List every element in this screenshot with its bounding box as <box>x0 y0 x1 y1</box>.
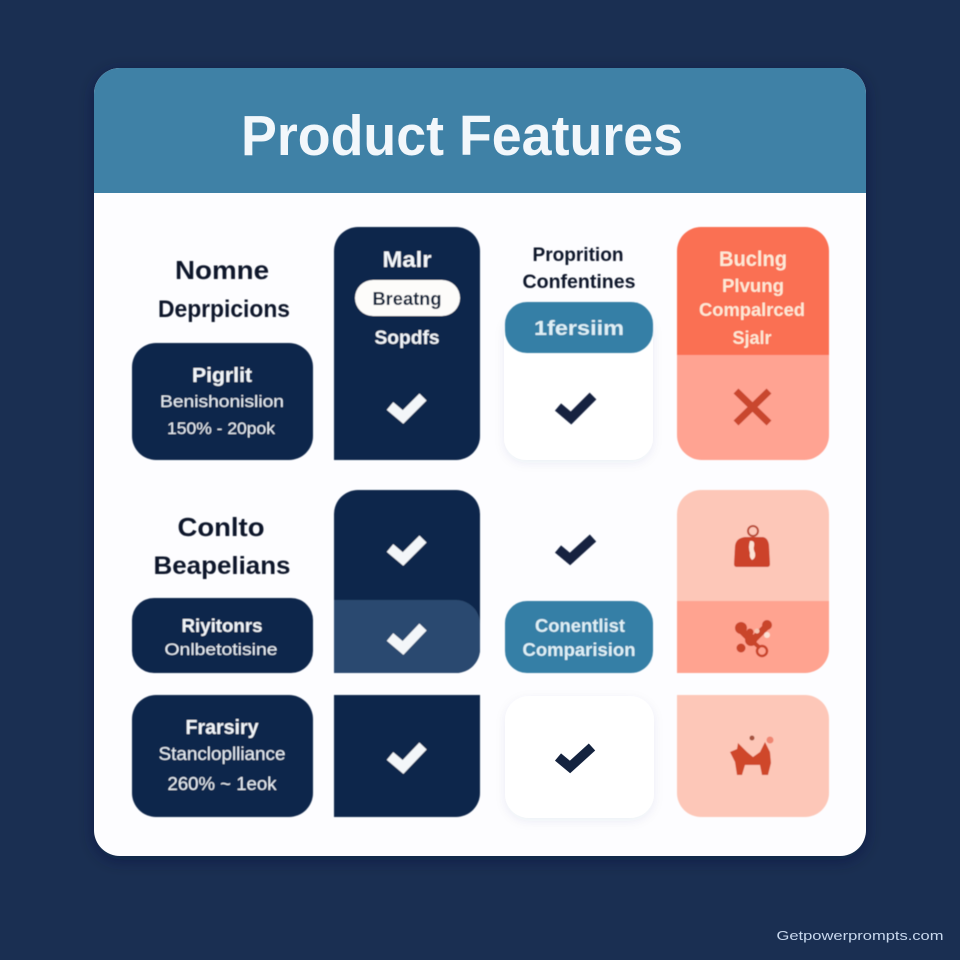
column card: Malr: Breatng <box>372 289 442 309</box>
row heading: Conlto Beapelians: Beapelians <box>154 552 290 580</box>
panel: main card <box>94 68 866 856</box>
icon: check <box>558 747 592 767</box>
header band <box>94 68 866 193</box>
icon: dog <box>730 736 774 775</box>
column card: Buclng Plvung Compalrced Sjalr: Plvung <box>722 276 784 296</box>
icon: check <box>390 539 423 559</box>
row heading: Nomne Deprpicions <box>158 255 290 323</box>
column card: check and Conentlist Comparision: Comparision <box>522 640 636 660</box>
column card: Buclng Plvung Compalrced Sjalr <box>677 227 829 460</box>
icon: check <box>390 746 423 767</box>
column card: row 2 checks <box>334 490 480 673</box>
icon: check <box>390 397 423 417</box>
column card: coral icons row 2 <box>677 490 829 673</box>
column card: Malr: Sopdfs <box>374 328 440 349</box>
row heading: Conlto Beapelians: Conlto <box>178 512 264 542</box>
row heading: Nomne Deprpicions: Deprpicions <box>158 296 290 323</box>
column card: Buclng Plvung Compalrced Sjalr: Sjalr <box>732 328 772 348</box>
column card: check and Conentlist Comparision: Conentlist <box>535 616 625 636</box>
row card: Pigrlit <box>132 343 313 460</box>
column card: row 3 navy <box>334 695 480 817</box>
column card: Malr: Malr <box>382 247 432 272</box>
row card: Pigrlit: 150% - 20pok <box>167 419 276 438</box>
row card: Pigrlit: Pigrlit <box>192 365 252 387</box>
icon: check <box>390 627 423 648</box>
column card: Proprition Confentines: Confentines <box>522 272 636 293</box>
row heading: Conlto Beapelians <box>154 512 290 580</box>
icon: scissors creature <box>735 620 772 656</box>
column card: row 3 coral <box>677 695 829 817</box>
title: Product Features <box>241 104 683 168</box>
row card: Frarsiry: 260% ~ 1eok <box>168 774 278 794</box>
row card: Frarsiry: Frarsiry <box>186 717 259 739</box>
row card: Riyitonrs: Onlbetotisine <box>164 640 278 659</box>
row card: Frarsiry: Stancloplliance <box>158 744 286 764</box>
row card: Riyitonrs: Riyitonrs <box>182 616 262 636</box>
column card: Proprition Confentines: 1fersiim <box>534 318 624 340</box>
row heading: Nomne Deprpicions: Nomne <box>175 255 269 285</box>
column card: Proprition Confentines: Proprition <box>532 245 624 266</box>
pill: Breatng <box>355 280 460 316</box>
row card: Frarsiry <box>132 695 313 817</box>
icon: check <box>558 538 593 559</box>
watermark: Getpowerprompts.com <box>776 928 944 943</box>
icon: bag <box>734 526 770 567</box>
icon: check <box>558 396 593 418</box>
icon: cross <box>736 391 769 423</box>
column card: row 3 white <box>505 696 654 818</box>
row card: Riyitonrs <box>132 598 313 673</box>
column card: Buclng Plvung Compalrced Sjalr: Buclng <box>719 248 787 271</box>
row card: Pigrlit: Benishonislion <box>160 392 284 411</box>
column card: check and Conentlist Comparision <box>505 538 653 673</box>
pill: 1fersiim <box>505 302 653 353</box>
column card: Buclng Plvung Compalrced Sjalr: Compalrced <box>699 300 805 320</box>
column card: Proprition Confentines <box>504 245 653 460</box>
column card: Malr <box>334 227 480 460</box>
